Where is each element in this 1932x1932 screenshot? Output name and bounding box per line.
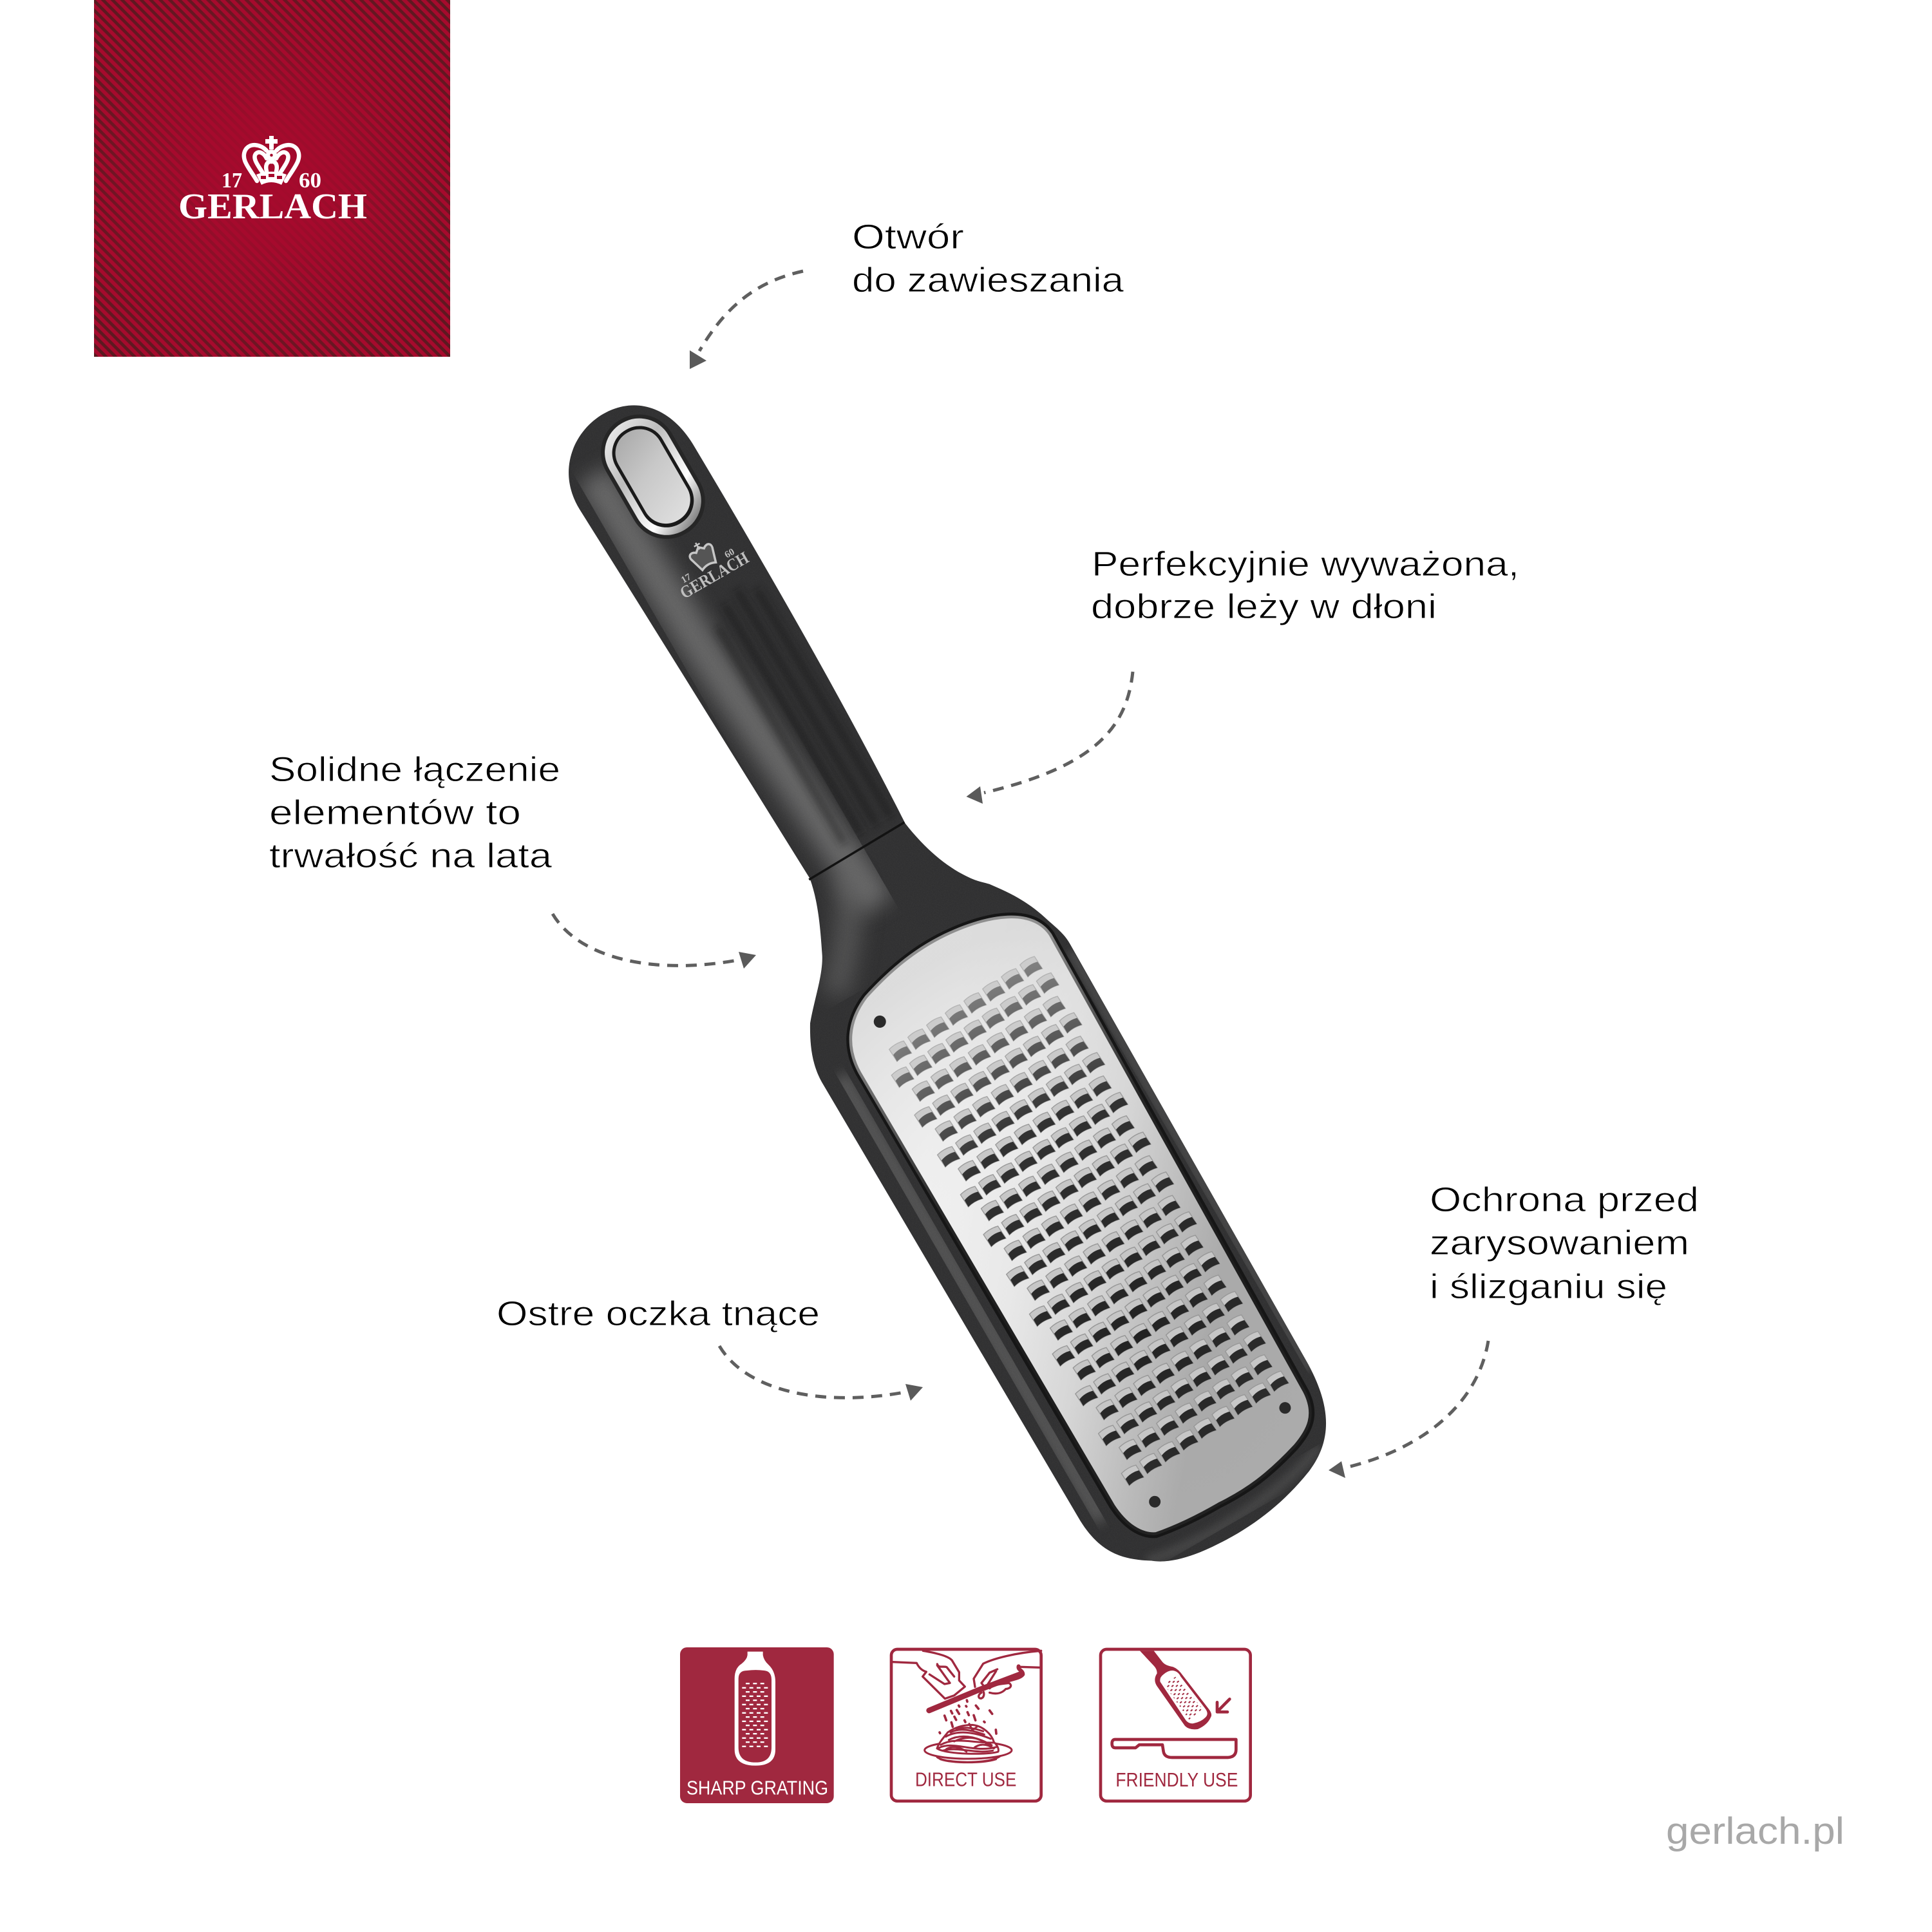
website address: gerlach.pl	[1666, 1810, 1844, 1852]
callout: protection text: zarysowaniem	[1430, 1224, 1689, 1262]
callout: hanging hole text: do zawieszania	[852, 261, 1124, 299]
arrow: to hanging hole	[690, 271, 803, 369]
icon: sharp grating	[680, 1647, 834, 1803]
callout: balance text: Perfekcyjnie wyważona,	[1092, 545, 1519, 583]
arrow: to handle	[966, 672, 1133, 804]
label: FRIENDLY USE	[1115, 1770, 1238, 1791]
handle highlight	[593, 460, 878, 922]
grating plate	[819, 887, 1341, 1554]
head highlight	[840, 1074, 1103, 1522]
rivets	[870, 934, 1301, 1510]
cutting holes	[875, 952, 1293, 1486]
callout: balance text	[1091, 545, 1519, 626]
icon: crown	[244, 136, 299, 185]
tilted grater	[1140, 1651, 1211, 1729]
handle logo: 17	[679, 572, 693, 585]
pan	[1112, 1739, 1236, 1757]
panel: red logo square	[94, 0, 450, 357]
logo year 17: 17	[222, 169, 242, 193]
falling cheese	[940, 1700, 996, 1734]
handle logo: GERLACH	[677, 548, 752, 603]
label: SHARP GRATING	[687, 1778, 828, 1799]
product: grater	[569, 405, 1327, 1562]
handle logo: 60	[723, 547, 737, 560]
callout: sharp eyes text: Ostre oczka tnące	[497, 1294, 820, 1333]
seam between handle and neck	[808, 822, 905, 880]
handle logo	[663, 524, 752, 603]
label: DIRECT USE	[915, 1769, 1016, 1790]
arrow: to rim	[1329, 1341, 1488, 1478]
callout: joint text: Solidne łączenie	[269, 750, 560, 789]
icon: friendly use	[1101, 1649, 1251, 1801]
plate of spaghetti	[925, 1724, 1012, 1763]
callout: joint text: elementów to	[269, 793, 521, 832]
grater pictogram	[735, 1652, 775, 1766]
arrow: to grating plate	[719, 1346, 923, 1401]
small arrow	[1217, 1699, 1229, 1712]
hands and grater	[893, 1651, 1041, 1710]
arrow: to joint	[553, 914, 756, 969]
callout: hanging hole text: Otwór	[852, 218, 964, 256]
hanging hole	[587, 401, 719, 553]
callout: hanging hole text	[852, 218, 1124, 299]
callout: protection text: Ochrona przed	[1430, 1180, 1699, 1219]
callout: joint text	[269, 750, 560, 875]
callout: joint text: trwałość na lata	[269, 837, 553, 875]
grater body	[569, 405, 1327, 1562]
icon: direct use	[891, 1649, 1041, 1801]
callout: protection text	[1430, 1180, 1699, 1306]
callout: balance text: dobrze leży w dłoni	[1091, 587, 1437, 626]
striped background	[94, 0, 450, 357]
callout: protection text: i ślizganiu się	[1430, 1267, 1667, 1306]
logo year 60: 60	[299, 169, 321, 193]
handle ribs	[706, 580, 891, 844]
logo wordmark: GERLACH	[178, 187, 367, 227]
